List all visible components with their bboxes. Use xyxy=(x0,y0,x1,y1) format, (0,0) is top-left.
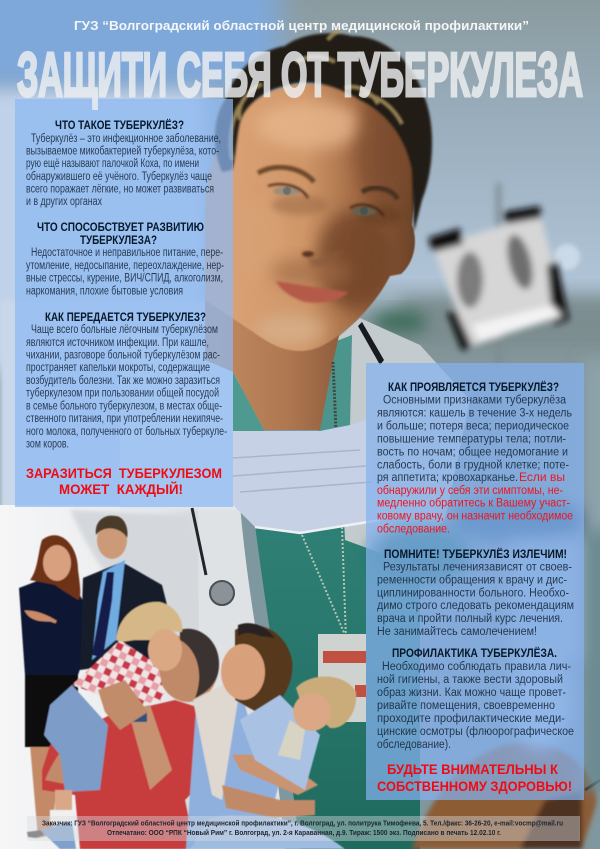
warning text: see a doctor: Если вы xyxy=(519,472,565,484)
upper coat behind panel and shoulder xyxy=(120,330,240,510)
woman hugging xyxy=(186,623,318,849)
text block: transmission: зом коров. xyxy=(26,438,69,450)
callout: be attentive to your health xyxy=(377,762,572,794)
stethoscope tube and chain xyxy=(358,322,384,365)
text block: symptoms: Основными признаками туберкулёза xyxy=(383,395,567,407)
text block: transmission: Чаще всего больные лёгочным туберкулёзом xyxy=(31,324,218,336)
text block: definition: обнаружившего её учёного. Туберкулёз чаще xyxy=(26,171,212,183)
text block: definition: всего поражает лёгкие, но может развиваться xyxy=(26,184,214,196)
text block: transmission: пространяет капельки мокроты, содержащие xyxy=(26,362,210,374)
left information panel xyxy=(15,99,233,507)
text block: symptoms: повышение температуры тела; потли- xyxy=(377,434,566,446)
text block: transmission: туберкулезом при пользовании общей посудой xyxy=(26,388,219,400)
heading: what is tuberculosis: ЧТО ТАКОЕ ТУБЕРКУЛЁЗ? xyxy=(55,119,184,132)
organisation subtitle: ГУЗ “Волгоградский областной центр медицинской профилактики” xyxy=(74,18,529,33)
warning text: see a doctor xyxy=(377,472,573,535)
text block: symptoms: ря аппетита; кровохарканье. xyxy=(377,472,518,484)
heading: contributing factors: ТУБЕРКУЛЕЗА? xyxy=(80,235,157,247)
text block: prevention: ной гигиены, а также вести здоровый xyxy=(377,674,563,686)
lower coat / scrubs xyxy=(198,505,285,849)
text block: symptoms xyxy=(377,395,572,484)
text block: contributing factors: утомление, недосыпание, переохлаждение, нер- xyxy=(26,260,224,272)
eyes xyxy=(273,186,301,196)
callout: anyone can get infected: МОЖЕТ КАЖДЫЙ! xyxy=(59,482,183,497)
text block: definition xyxy=(26,133,221,208)
footer imprint xyxy=(27,816,580,841)
x-ray film xyxy=(428,183,569,368)
text block: contributing factors: наркомания, плохие бытовые условия xyxy=(26,286,183,298)
text block: definition: и в других органах xyxy=(26,196,102,208)
text block: treatment: Не занимайтесь самолечением! xyxy=(377,626,537,638)
child in blue jacket xyxy=(240,676,356,790)
text block: transmission: ного молока, полученного от больных туберкуле- xyxy=(26,426,227,438)
text block: contributing factors xyxy=(26,247,224,298)
surgical mask xyxy=(233,420,380,534)
heading: symptoms: КАК ПРОЯВЛЯЕТСЯ ТУБЕРКУЛЁЗ? xyxy=(388,381,559,394)
callout: be attentive to your health: БУДЬТЕ ВНИМАТЕЛЬНЫ К xyxy=(387,762,559,777)
child in checked shirt xyxy=(40,602,182,849)
text block: transmission: являются источником инфекции. При кашле, xyxy=(26,337,209,349)
family photo xyxy=(19,516,356,849)
warning text: see a doctor: обследование. xyxy=(377,523,450,535)
text block: prevention: ривайте помещения, своевременно xyxy=(377,700,555,712)
businessman xyxy=(80,516,167,670)
text block: transmission: возбудитель болезни. Так же можно заразиться xyxy=(26,375,220,387)
text block: treatment: циплинированности больного. Необхо- xyxy=(377,588,569,600)
businesswoman xyxy=(19,535,95,838)
man in red shirt xyxy=(42,629,219,849)
collars xyxy=(233,372,265,432)
text block: contributing factors: Недостаточное и неправильное питание, пере- xyxy=(31,247,223,259)
neck xyxy=(205,300,345,430)
heading: transmission: КАК ПЕРЕДАЕТСЯ ТУБЕРКУЛЕЗ? xyxy=(45,312,206,324)
heading: contributing factors xyxy=(37,222,204,247)
text block: definition: вызываемое микобактерией туберкулёза, кото- xyxy=(26,146,219,158)
blue patches behind right panel xyxy=(370,360,600,790)
text block: symptoms: и больше; потеря веса; периодическое xyxy=(377,421,569,433)
warning text: see a doctor: обнаружили у себя эти симптомы, не- xyxy=(377,485,563,497)
footer imprint: Отпечатано: ООО “РПК “Новый Рим” г. Волгоград, ул. 2-я Караванная, д.9. Тираж: 1500 экз. Подписано в печать 12.02.10 г. xyxy=(107,828,501,837)
text block: treatment: врача и пройти полный курс лечения. xyxy=(377,613,563,625)
text block: treatment: димо строго следовать рекомендациям xyxy=(377,600,574,612)
nose xyxy=(302,248,345,266)
text block: prevention: цинские осмотры (флюорографическое xyxy=(377,726,574,738)
warning text: see a doctor: медленно обратитесь к Вашему участ- xyxy=(377,498,570,510)
right information panel xyxy=(366,363,584,800)
text block: transmission: чихании, разговоре больной туберкулёзом рас- xyxy=(26,350,220,362)
callout: anyone can get infected xyxy=(26,466,222,497)
text block: transmission: в семье больного туберкулезом, в местах обще- xyxy=(26,400,222,412)
hair xyxy=(215,33,432,232)
text block: prevention: Необходимо соблюдать правила лич- xyxy=(382,661,571,673)
mouth xyxy=(276,281,348,303)
eyebrows xyxy=(258,167,314,182)
jeans xyxy=(190,815,345,849)
callout: anyone can get infected: ЗАРАЗИТЬСЯ ТУБЕРКУЛЕЗОМ xyxy=(26,466,222,481)
doctor's head xyxy=(205,30,432,351)
heading: contributing factors: ЧТО СПОСОБСТВУЕТ РАЗВИТИЮ xyxy=(37,222,204,234)
text block: prevention: обследование). xyxy=(377,739,451,751)
hand behind right panel xyxy=(412,742,596,849)
text block: prevention: проходите профилактические меди- xyxy=(377,713,565,725)
text block: treatment: Результаты лечениязависят от своев- xyxy=(383,562,572,574)
text block: definition: Туберкулёз – это инфекционное заболевание, xyxy=(31,133,221,145)
text block: prevention xyxy=(377,661,574,751)
heading: curable: ПОМНИТЕ! ТУБЕРКУЛЁЗ ИЗЛЕЧИМ! xyxy=(384,548,567,561)
text block: treatment xyxy=(377,562,574,638)
text block: symptoms: вость по ночам; общее недомогание и xyxy=(377,447,568,459)
callout: be attentive to your health: СОБСТВЕННОМУ ЗДОРОВЬЮ! xyxy=(377,779,572,794)
text block: symptoms: слабость, боли в грудной клетке; поте- xyxy=(377,459,569,471)
text block: prevention: образ жизни. Как можно чаще провет- xyxy=(377,687,566,699)
text block: transmission xyxy=(26,324,227,450)
doctor's neck and coat xyxy=(0,300,470,849)
text block: transmission: ственного питания, при употреблении некипяче- xyxy=(26,413,223,425)
text block: treatment: ременности обращения к врачу и дис- xyxy=(377,575,567,587)
text block: definition: рую ещё называют палочкой Коха, по имени xyxy=(26,158,199,170)
text block: symptoms: являются: кашель в течение 3-х недель xyxy=(377,408,572,420)
text block: contributing factors: вные стрессы, курение, ВИЧ/СПИД, алкоголизм, xyxy=(26,272,223,284)
warning text: see a doctor: ковому врачу, он назначит необходимое xyxy=(377,511,573,523)
heading: prevention: ПРОФИЛАКТИКА ТУБЕРКУЛЁЗА. xyxy=(392,647,557,660)
